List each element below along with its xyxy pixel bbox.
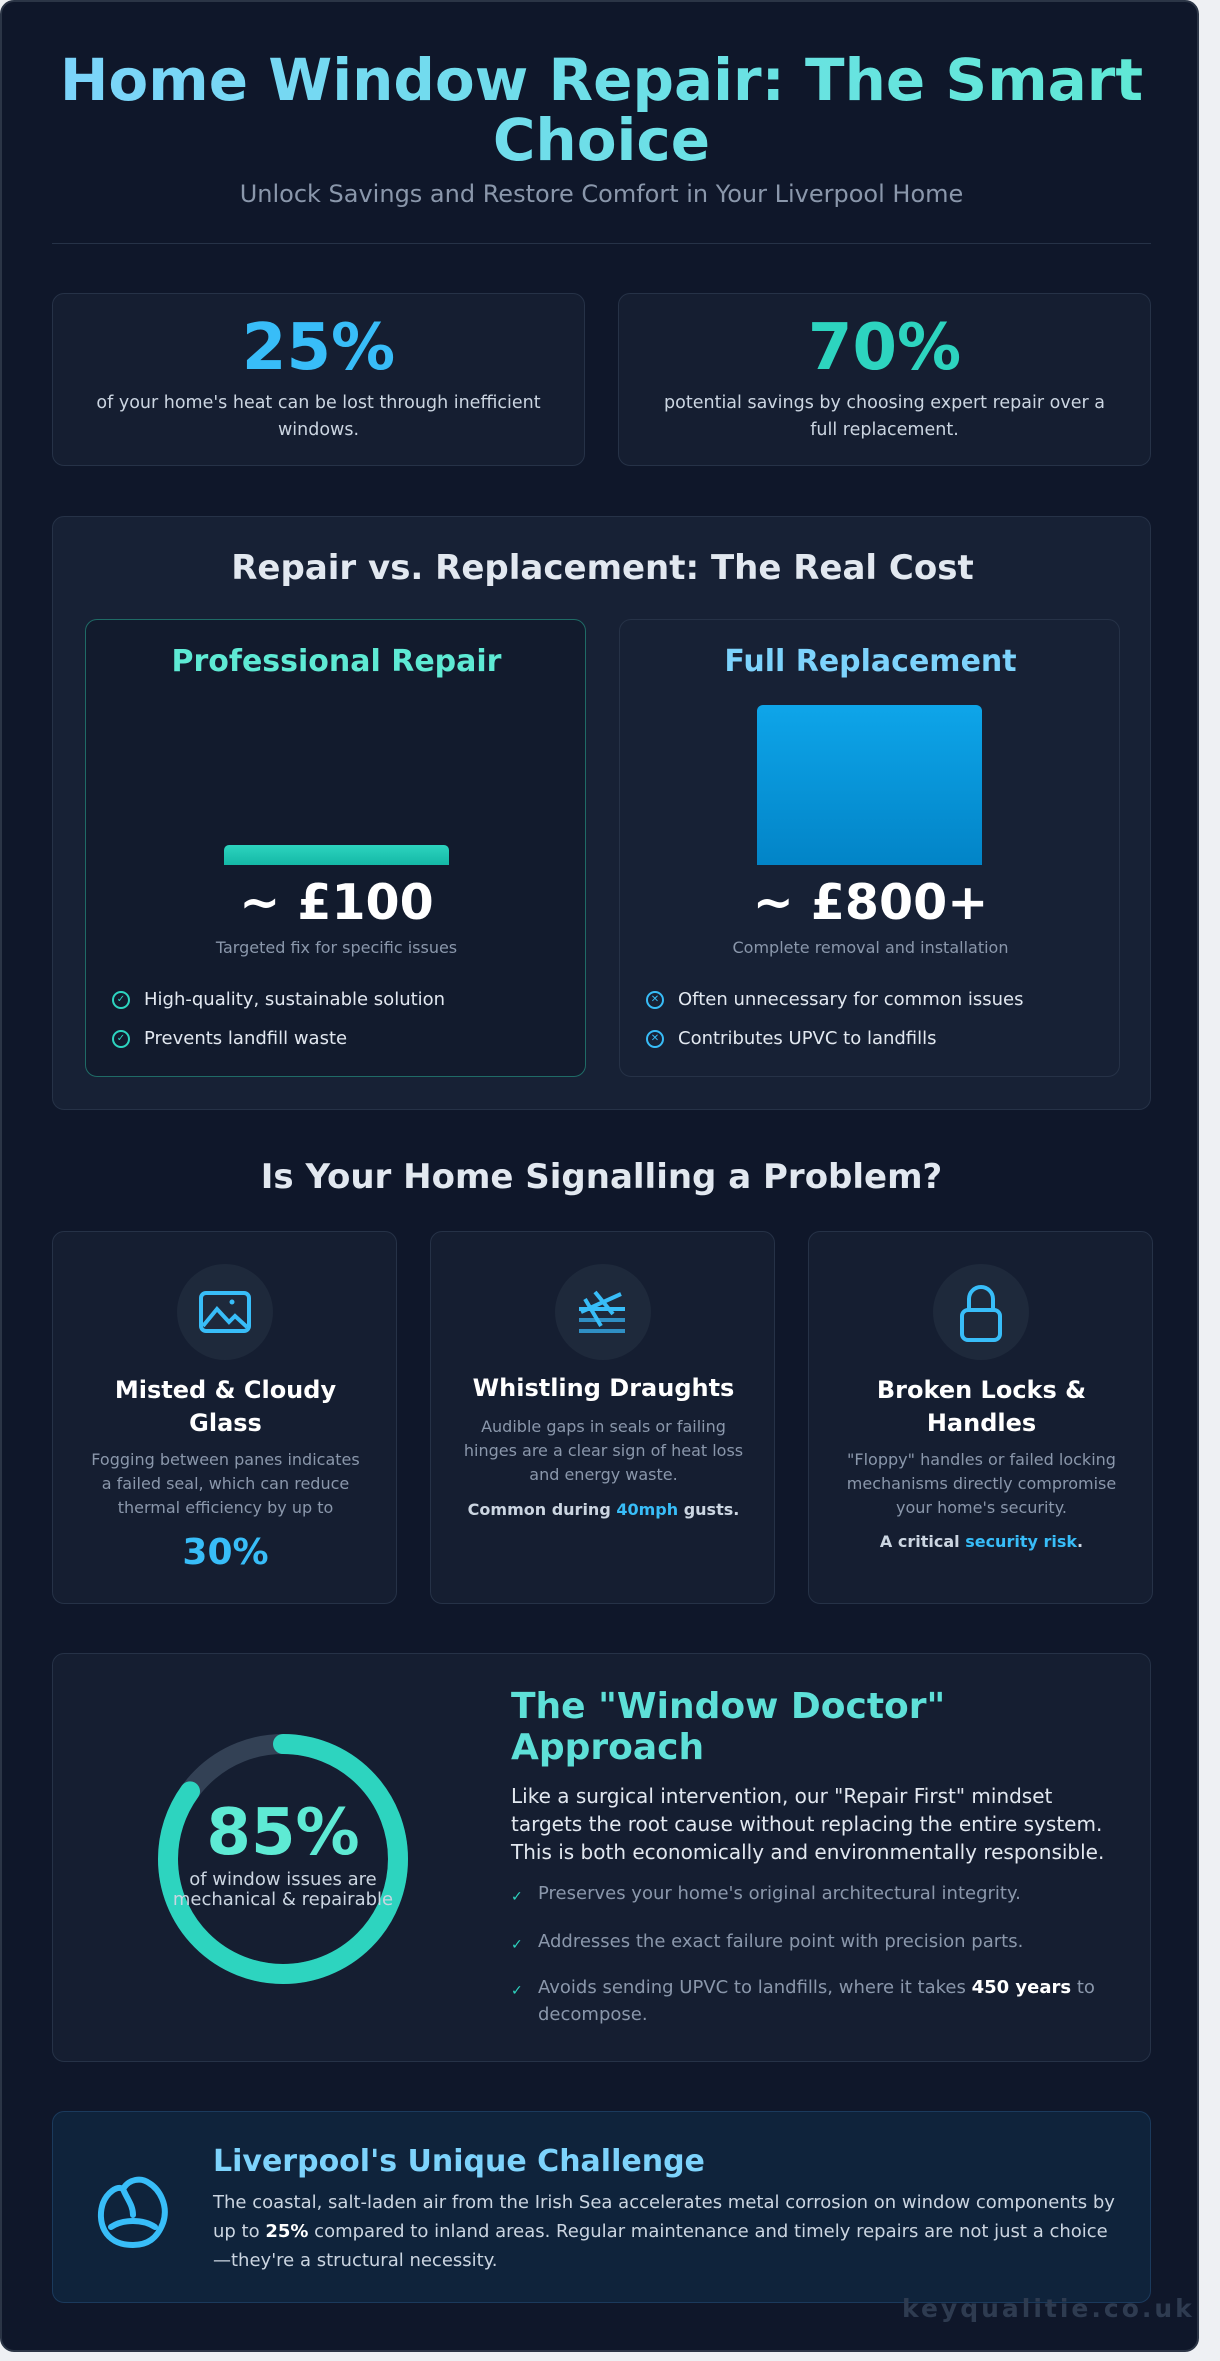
title: Choice: [493, 106, 710, 174]
card: full replacement: ✕: [651, 1033, 659, 1044]
card: full replacement: Contributes UPVC to landfills: [678, 1028, 937, 1049]
watermark: keyqualitie.co.uk: [902, 2294, 1195, 2323]
stat card: 70%: [618, 293, 1151, 466]
text: approach: [510, 1686, 1104, 2025]
heading: Repair vs. Replacement: The Real Cost: [231, 548, 974, 588]
panel: repair vs replacement: [52, 516, 1151, 1110]
bullets: High-quality, sustainable solution: [144, 989, 445, 1010]
text: approach: ✓: [511, 1937, 523, 1953]
stat card: 25%: 25%: [242, 311, 395, 385]
panel: window doctor: [52, 1653, 1151, 2062]
card: full replacement: Full Replacement: [724, 644, 1017, 679]
subtitle: Unlock Savings and Restore Comfort in Your Liverpool Home: [240, 180, 963, 208]
card: draughts: [430, 1231, 775, 1604]
chart: 85% donut: of window issues are mechanical & repairable: [173, 1869, 393, 1910]
title: Home Window Repair: The Smart: [60, 46, 1143, 114]
card: locks: Handles: [927, 1409, 1036, 1437]
card: draughts: Common during 40mph gusts.: [468, 1500, 739, 1519]
text: approach: Addresses the exact failure point with precision parts.: [538, 1931, 1023, 1952]
text: approach: Approach: [511, 1727, 704, 1768]
stat card: 70%: potential savings by choosing expert repair over a full replacement.: [664, 393, 1105, 440]
stat card: 70%: 70%: [808, 311, 961, 385]
bullets: ✓: [117, 994, 125, 1005]
card: misted glass: Fogging between panes indicates a failed seal, which can reduce thermal efficiency by up to: [91, 1450, 360, 1517]
card: misted glass: [52, 1231, 397, 1604]
panel: liverpool challenge: Liverpool's Unique Challenge: [213, 2144, 705, 2179]
card: full replacement: ~ £800+: [753, 874, 988, 931]
icon: leaf: [98, 2176, 168, 2248]
heading: signals: Is Your Home Signalling a Problem?: [261, 1157, 942, 1197]
stat card: 25%: of your home's heat can be lost through inefficient windows.: [96, 393, 541, 440]
panel: liverpool challenge: [52, 2111, 1151, 2303]
card: draughts: Audible gaps in seals or failing hinges are a clear sign of heat loss and energy waste.: [464, 1417, 743, 1484]
icon: wind: [555, 1264, 651, 1360]
card: locks: A critical security risk.: [880, 1532, 1083, 1551]
text: approach: Preserves your home's original architectural integrity.: [538, 1883, 1021, 1904]
card: full replacement: Complete removal and installation: [732, 938, 1008, 957]
icon: padlock: [933, 1264, 1029, 1360]
chart: 85% donut: [158, 1734, 408, 1984]
chart: 85% donut: 85%: [206, 1796, 360, 1870]
bar: repair cost: [224, 845, 449, 865]
card: misted glass: Misted & Cloudy: [115, 1376, 336, 1404]
card: professional repair: [85, 619, 586, 1077]
card: full replacement: [619, 619, 1120, 1077]
bar: replacement cost: [757, 705, 982, 865]
card: professional repair: ~ £100: [239, 874, 434, 931]
bullets: ✓: [117, 1033, 125, 1044]
card: locks: [808, 1231, 1153, 1604]
card: full replacement: Often unnecessary for common issues: [678, 989, 1024, 1010]
title: [2, 50, 1201, 170]
card: misted glass: Glass: [189, 1409, 262, 1437]
text: approach: Avoids sending UPVC to landfills, where it takes 450 years to decompose.: [538, 1977, 1095, 2025]
text: approach: ✓: [511, 1983, 523, 1999]
icon: picture: [177, 1264, 273, 1360]
text: approach: Like a surgical intervention, our "Repair First" mindset targets the root cause without replacing the entire system. This is both economically and environmentally responsible.: [511, 1784, 1104, 1864]
text: approach: The "Window Doctor": [511, 1686, 945, 1727]
card: misted glass: 30%: [182, 1532, 269, 1573]
bullets: Prevents landfill waste: [144, 1028, 347, 1049]
card: professional repair: Targeted fix for specific issues: [216, 938, 457, 957]
stat card: 25%: [52, 293, 585, 466]
text: approach: ✓: [511, 1889, 523, 1905]
card: locks: "Floppy" handles or failed locking mechanisms directly compromise your home's security.: [847, 1450, 1116, 1517]
panel: liverpool challenge: The coastal, salt-laden air from the Irish Sea accelerates metal corrosion on window components by up to 25% compared to inland areas. Regular maintenance and timely repairs are not just a choice —they're a structural necessity.: [213, 2192, 1115, 2271]
bullets: [112, 989, 445, 1049]
card: locks: Broken Locks &: [877, 1376, 1086, 1404]
card: draughts: Whistling Draughts: [473, 1374, 734, 1402]
card: full replacement: ✕: [651, 994, 659, 1005]
card: professional repair: Professional Repair: [172, 644, 501, 679]
